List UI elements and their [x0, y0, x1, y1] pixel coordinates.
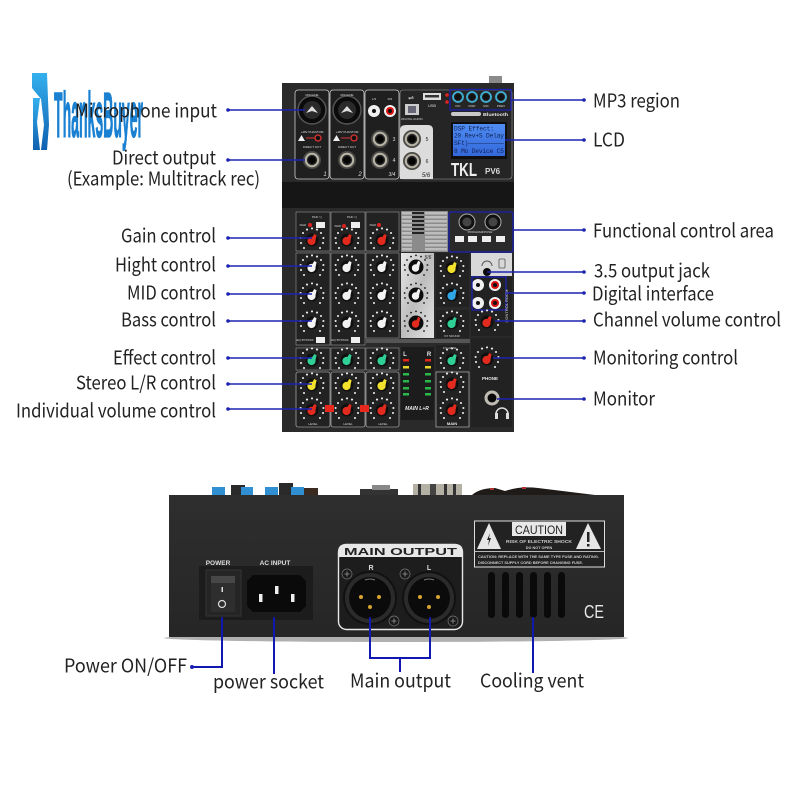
main output XLR panel [338, 544, 463, 630]
MP3 region: four play buttons in blue frame [450, 90, 511, 110]
callout: Functional control area [513, 217, 774, 244]
panel: channel 5/6 jacks: 5/6 [422, 173, 431, 179]
panel: FX sound: FX SOUND [444, 334, 461, 338]
panel: gain row: PAD / ▯ [347, 215, 357, 219]
callout: Hight control: Hight control [115, 251, 216, 278]
text: ThanksBuyer [54, 79, 143, 151]
panel: gain row: PEAK [335, 225, 342, 228]
callout: Channel volume control [495, 306, 781, 333]
AC power socket [247, 575, 306, 612]
panel: gain row: PAD / ▯ [312, 215, 322, 219]
LCD display: DSP Effect: [454, 126, 494, 132]
callout: Power ON/OFF [64, 617, 222, 679]
mixer body, top view [282, 76, 514, 432]
panel: yellow and blue knobs [436, 253, 469, 307]
panel: gain row [296, 212, 399, 251]
callout: MID control [127, 279, 312, 306]
callout: Monitoring control: Monitoring control [593, 344, 738, 371]
panel: pan and level knobs [296, 372, 399, 427]
MP3 region: four play buttons in blue frame: MIC [483, 104, 490, 108]
panel: main L+R LED meter: R [427, 352, 432, 358]
callout: Bass control [121, 306, 312, 333]
callout: Microphone input [75, 97, 305, 124]
callout: Hight control [115, 251, 312, 278]
callout: power socket [213, 617, 324, 695]
callout: Channel volume control: Channel volume control [593, 306, 781, 333]
caution label: DISCONNECT SUPPLY CORD BEFORE CHANGING FUSE. [478, 561, 583, 565]
bluetooth label [451, 112, 508, 117]
panel: effect send knobs [296, 347, 399, 370]
callout: Monitor: Monitor [593, 385, 656, 412]
panel: EQ high, mid, low knobs: EQ BYPASS [297, 338, 313, 342]
panel: FX level [436, 345, 469, 370]
rear view of mixer [164, 483, 628, 642]
callout: Stereo L/R control [76, 369, 312, 396]
MP3 region: four play buttons in blue frame: PREV [497, 104, 505, 108]
cooling vent slots [488, 572, 565, 618]
callout: Microphone input: Microphone input [75, 97, 217, 124]
callout: Gain control: Gain control [121, 222, 216, 249]
LCD display: 8 Mo Device C5 [454, 148, 504, 155]
power panel and switch: POWER [206, 560, 231, 567]
panel: input channel 2 [330, 90, 364, 179]
callout: MP3 region [511, 87, 680, 114]
callout: 3.5 output jack: 3.5 output jack [594, 257, 710, 284]
effects preset list [401, 211, 448, 252]
functional control area [449, 212, 513, 252]
panel: main L+R LED meter [401, 347, 434, 420]
panel: channel 3/4 inputs [365, 90, 399, 179]
LCD display: SFt)────────── [454, 140, 504, 147]
panel: input channel 2: DIRECT OUT [338, 145, 356, 149]
callout: Power ON/OFF: Power ON/OFF [64, 652, 187, 679]
panel: input channel 2: 2 [357, 172, 362, 178]
callout: Individual volume control: Individual volume control [16, 397, 216, 424]
panel: pan and level knobs: LEVEL [378, 422, 388, 426]
phone monitor panel: PHONE [482, 376, 498, 381]
caution label: CAUTION: REPLACE WITH THE SAME TYPE FUSE AND RATING. [478, 555, 599, 559]
rear panel body [169, 495, 624, 637]
callout: Direct output: Direct output [112, 144, 216, 171]
functional control area: PROGRAM/PUSH [468, 230, 492, 234]
gap between mixer rear and front panels [282, 182, 514, 208]
callout: Cooling vent: Cooling vent [480, 667, 584, 694]
MP3 region: four play buttons in blue frame: INC [455, 104, 461, 108]
panel: input channel 1: +48V PHANTOM [301, 130, 324, 134]
panel: main level knobs: MAIN [447, 421, 457, 426]
rear panel shadow [164, 634, 628, 642]
digital interface RCA block: CONTROL ROOM [504, 290, 509, 322]
3.5 output jack panel [471, 253, 512, 276]
panel: input channel 2: MIC/LINE [340, 93, 354, 97]
panel: gain row: PEAK [370, 224, 377, 227]
LCD display [451, 122, 507, 159]
panel: channel 5/6 silver strip: 5/6 [425, 255, 432, 261]
panel: channel 5/6 silver strip [401, 253, 434, 338]
panel: input channel 2: +48V PHANTOM [336, 130, 359, 134]
phone monitor panel [471, 338, 512, 427]
logo: ThanksBuyer watermark [32, 73, 143, 151]
callout: Cooling vent [480, 617, 584, 694]
callout: Effect control: Effect control [113, 344, 216, 371]
panel: channel 5/6 jacks: 5 [426, 137, 429, 143]
panel: channel 3/4 inputs: 3 [393, 137, 396, 143]
panel: main L+R LED meter: L [403, 352, 407, 358]
main output XLR panel: R [368, 565, 374, 572]
callout: Digital interface: Digital interface [592, 280, 714, 307]
panel: pan and level knobs: LEVEL [343, 422, 353, 426]
callout: Monitor [497, 385, 656, 412]
panel: FX level: FX LEVEL [443, 346, 457, 350]
callout: MP3 region: MP3 region [593, 87, 680, 114]
callout: power socket: power socket [213, 668, 324, 695]
LCD display: 20 Rev+S Delay [454, 132, 504, 140]
rear connectors peeking over top edge [212, 483, 595, 495]
callout: MID control: MID control [127, 279, 216, 306]
callout: Main output: Main output [350, 667, 451, 694]
panel: FX sound [436, 310, 469, 338]
panel: input channel 1 [295, 90, 329, 179]
callout: LCD: LCD [593, 126, 625, 153]
caution label: DO NOT OPEN [526, 546, 553, 550]
caution label: CAUTION [515, 523, 563, 537]
callout: Digital interface [506, 280, 714, 307]
panel: channel 5/6 jacks: 6 [426, 159, 429, 165]
panel: USB and digital audio ports: USB [428, 103, 436, 108]
panel: channel 3/4 inputs: L/3 [372, 97, 376, 101]
panel: USB and digital audio ports: DIGITAL AUDIO [401, 117, 423, 121]
callout: 3.5 output jack [487, 257, 710, 284]
panel: main L+R LED meter: MAIN L+R [405, 406, 429, 412]
panel: USB and digital audio ports [400, 90, 512, 179]
power panel and switch [199, 560, 313, 620]
stripe band between panels [366, 339, 470, 343]
TKL PV6 brand: TKL [451, 160, 477, 180]
mixer top edge button [489, 76, 502, 84]
callout: Gain control [121, 222, 312, 249]
MP3 region: four play buttons in blue frame: DISP [468, 104, 476, 108]
main output XLR panel: MAIN OUTPUT [344, 547, 457, 558]
callout: Direct output [67, 144, 305, 192]
callout: Direct output: (Example: Multitrack rec) [67, 165, 260, 192]
callout: Stereo L/R control: Stereo L/R control [76, 369, 216, 396]
panel: channel 3/4 inputs: 3/4 [389, 172, 396, 178]
callout: Main output [350, 617, 451, 694]
callout: LCD [505, 126, 625, 153]
CE mark: CE [584, 602, 604, 622]
panel: input channel 1: 1 [323, 172, 327, 178]
caution label [474, 521, 604, 567]
callout: Functional control area: Functional control area [593, 217, 774, 244]
callout: Effect control [113, 344, 312, 371]
panel: EQ high, mid, low knobs [296, 253, 399, 345]
panel: channel 5/6 jacks [400, 125, 433, 179]
panel: input channel 1: DIRECT OUT [303, 145, 321, 149]
panel: channel 3/4 inputs: R/4 [388, 97, 393, 101]
panel: gain row: PEAK [300, 224, 307, 227]
TKL PV6 brand: PV6 [485, 167, 501, 176]
bluetooth label: Bluetooth [483, 112, 508, 117]
digital interface RCA block [471, 277, 512, 336]
mixer chassis [282, 83, 514, 432]
panel: EQ high, mid, low knobs: EQ BYPASS [332, 338, 348, 342]
caution label: RISK OF ELECTRIC SHOCK [506, 539, 572, 544]
power panel and switch: AC INPUT [260, 560, 290, 567]
callout: Bass control: Bass control [121, 306, 216, 333]
panel: main level knobs [436, 371, 469, 427]
panel: pan and level knobs: LEVEL [308, 422, 318, 426]
main output XLR panel: L [427, 565, 432, 572]
panel: channel 3/4 inputs: 4 [393, 158, 396, 164]
callout: Monitoring control [493, 344, 738, 371]
panel: input channel 1: MIC/LINE [305, 93, 319, 97]
panel: USB and digital audio ports: ⇌ [408, 95, 414, 102]
